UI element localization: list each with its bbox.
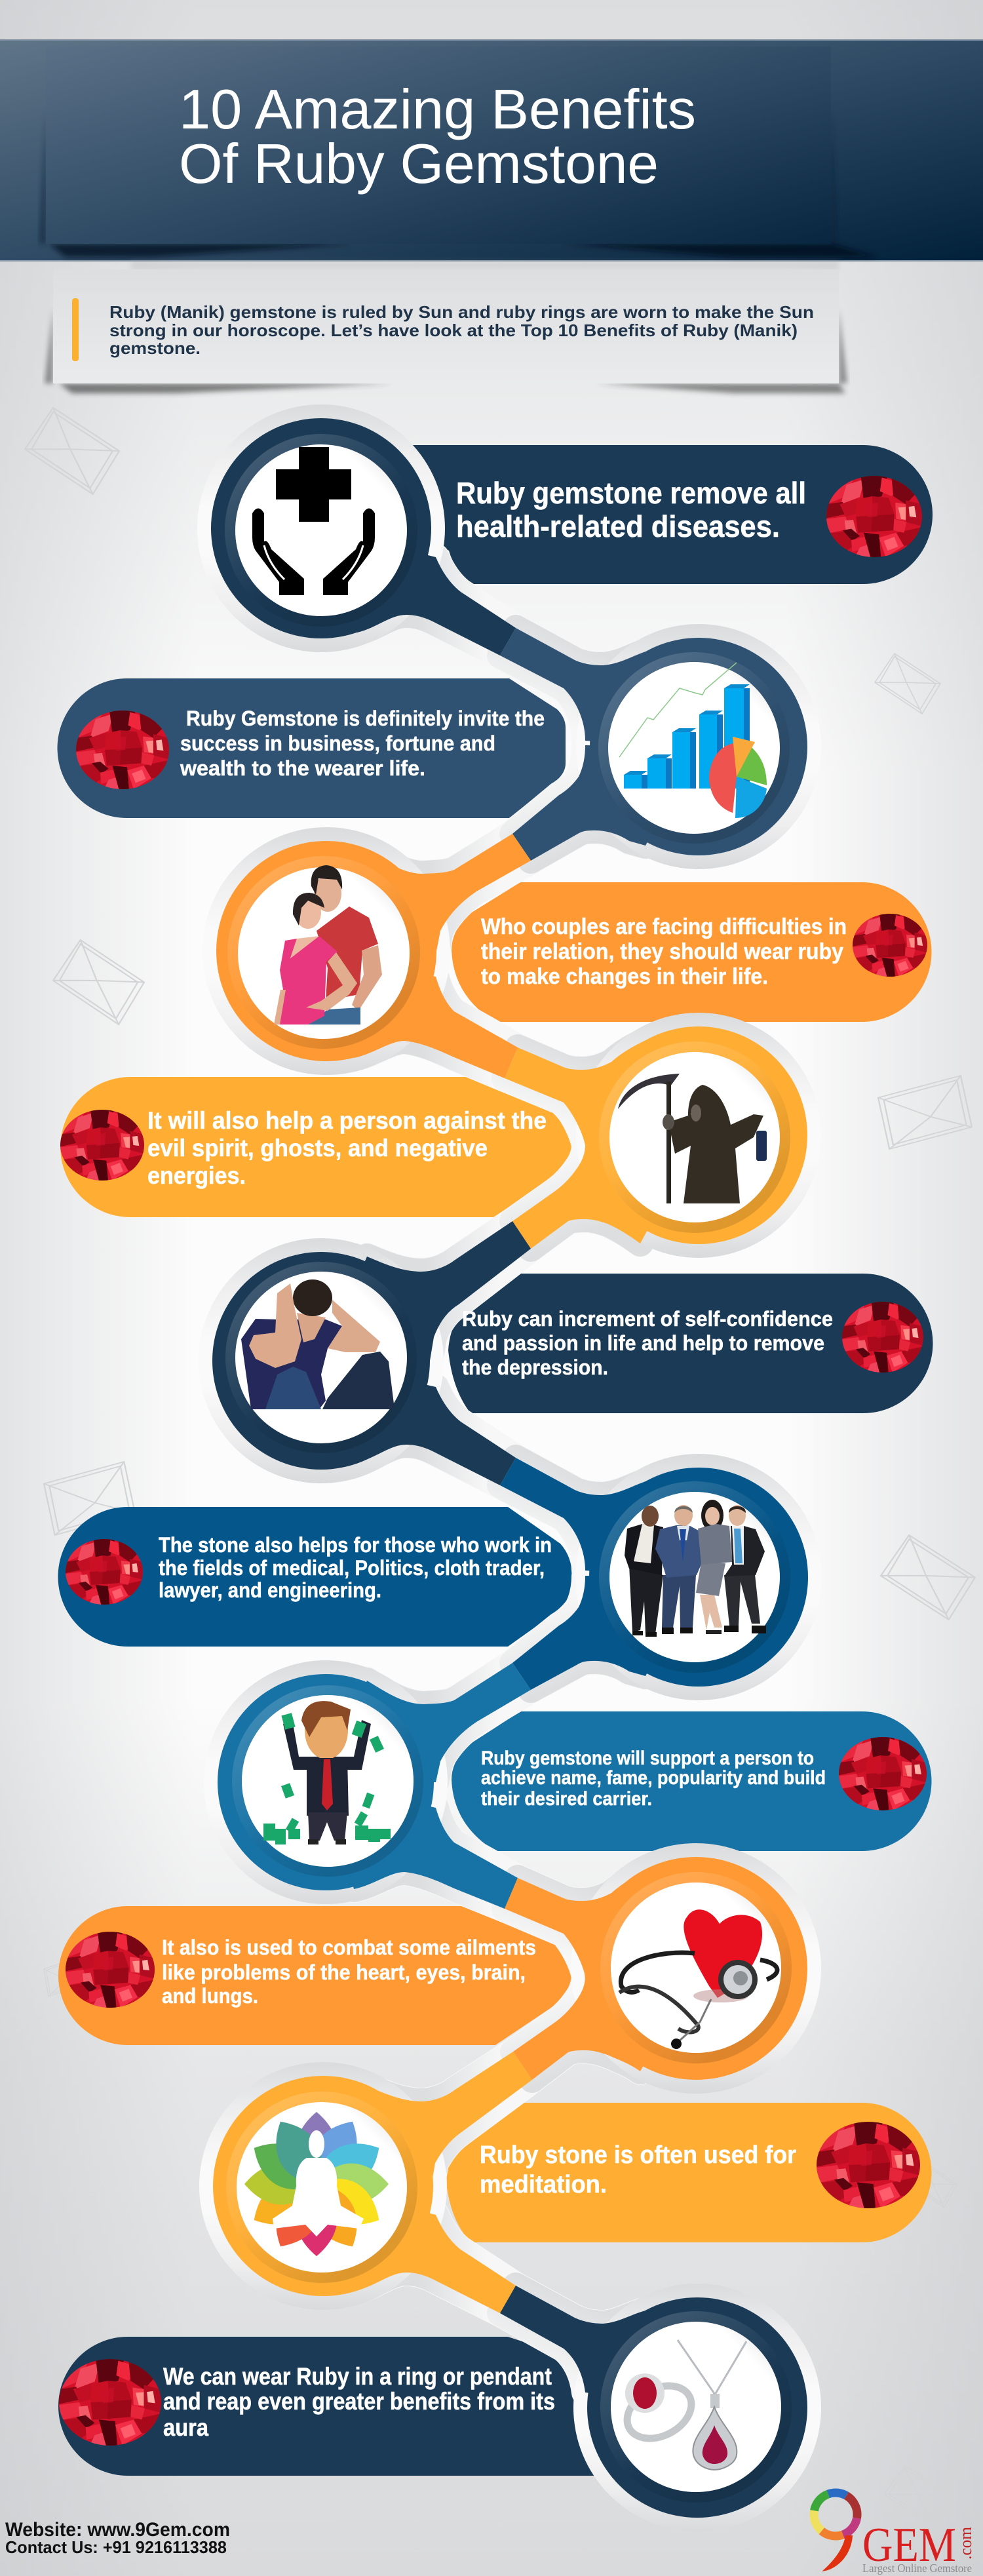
benefit 4 text: evil spirit, ghosts, and negative <box>147 1135 488 1161</box>
benefit 7 text <box>481 1747 826 1810</box>
benefit 5 text: and passion in life and help to remove <box>462 1331 824 1355</box>
inner white discs <box>225 434 792 2503</box>
benefit 3 text: to make changes in their life. <box>481 964 768 989</box>
benefit 2 text: success in business, fortune and <box>180 732 495 755</box>
icon: ruby ring and pendant <box>618 2340 746 2470</box>
benefit 4 text: energies. <box>147 1162 246 1189</box>
icon: couple <box>274 865 382 1025</box>
icon: depressed man <box>241 1279 395 1409</box>
benefit 10 text: and reap even greater benefits from its <box>163 2388 555 2415</box>
benefit 9 text: Ruby stone is often used for <box>480 2141 796 2169</box>
benefit 6 text <box>159 1533 552 1602</box>
pills: benefit banners <box>58 445 933 2476</box>
icon: bar chart and pie <box>619 663 767 818</box>
logo: 9GEM: GEM <box>862 2518 956 2572</box>
benefit 3 text: their relation, they should wear ruby <box>481 939 843 964</box>
logo: 9GEM: .com <box>956 2527 975 2560</box>
footer contact <box>5 2519 230 2557</box>
intro panel <box>45 261 847 393</box>
benefit 4 text: It will also help a person against the <box>147 1107 547 1134</box>
benefit 2 ring and connectors <box>500 628 807 861</box>
benefit 1 ring and connector <box>211 418 516 655</box>
benefit 9 text <box>480 2141 796 2198</box>
footer contact: Website: www.9Gem.com <box>5 2519 230 2541</box>
halos around circles and connectors <box>197 404 822 2531</box>
benefit 8 text: and lungs. <box>162 1984 258 2008</box>
logo: 9GEM: Largest Online Gemstore <box>862 2562 972 2575</box>
benefit 4 text <box>147 1107 547 1189</box>
title: Of Ruby Gemstone <box>179 133 659 195</box>
logo: 9GEM <box>805 2484 975 2575</box>
benefit 1 text <box>456 476 806 543</box>
benefit 6 text: lawyer, and engineering. <box>159 1578 381 1602</box>
benefit 3 ring and connectors <box>216 834 531 1078</box>
gems in benefit banners <box>59 476 927 2446</box>
benefit 1 text: health-related diseases. <box>456 509 780 543</box>
benefit 10 text: aura <box>163 2414 208 2441</box>
benefit 5 text <box>462 1307 833 1379</box>
intro panel: Ruby (Manik) gemstone is ruled by Sun and ruby rings are worn to make the Sun <box>109 302 814 322</box>
benefit 7 text: Ruby gemstone will support a person to <box>481 1747 814 1769</box>
benefit 5 ring and connectors <box>212 1221 531 1485</box>
background gem outlines <box>25 408 975 2526</box>
benefit 7 ring and connectors <box>218 1663 531 1909</box>
icon: businessman with money <box>263 1701 391 1844</box>
benefit 9 text: meditation. <box>480 2171 607 2198</box>
benefit 4 ring and connectors <box>505 1026 807 1249</box>
benefit 8 text <box>162 1936 536 2008</box>
title <box>179 79 696 195</box>
icon: cross and caring hands <box>252 447 375 595</box>
benefit 3 text <box>481 914 847 989</box>
benefit 2 text <box>180 707 545 780</box>
benefit 7 text: achieve name, fame, popularity and build <box>481 1767 826 1789</box>
benefit 8 text: like problems of the heart, eyes, brain, <box>162 1961 526 1984</box>
icon: business people <box>625 1500 766 1637</box>
benefit 7 text: their desired carrier. <box>481 1788 652 1810</box>
benefit 6 text: the fields of medical, Politics, cloth trader, <box>159 1556 545 1580</box>
benefit 6 ring and connectors <box>500 1458 808 1690</box>
benefit 8 text: It also is used to combat some ailments <box>162 1936 536 1959</box>
benefit 2 text: wealth to the wearer life. <box>180 756 425 780</box>
benefit 6 text: The stone also helps for those who work in <box>159 1533 552 1557</box>
benefit 5 text: Ruby can increment of self-confidence <box>462 1307 833 1331</box>
benefit 2 text: Ruby Gemstone is definitely invite the <box>186 707 545 730</box>
benefit 8 ring and connectors <box>505 1857 807 2080</box>
intro panel: strong in our horoscope. Let’s have look at the Top 10 Benefits of Ruby (Manik) <box>109 321 798 340</box>
benefit 5 text: the depression. <box>462 1356 608 1379</box>
benefit 10 text: We can wear Ruby in a ring or pendant <box>163 2363 552 2390</box>
benefit 1 text: Ruby gemstone remove all <box>456 476 806 510</box>
benefit 10 text <box>163 2363 555 2441</box>
intro panel: gemstone. <box>109 338 201 358</box>
benefit 3 text: Who couples are facing difficulties in <box>481 914 847 939</box>
footer contact: Contact Us: +91 9216113388 <box>5 2537 227 2557</box>
benefit 10 ring and connector <box>500 2286 807 2518</box>
icon: heart and stethoscope <box>619 1909 777 2049</box>
icon: meditation lotus <box>244 2111 389 2257</box>
title: 10 Amazing Benefits <box>179 79 696 141</box>
benefit 9 ring and connectors <box>213 2052 532 2313</box>
icon: grim reaper <box>618 1074 767 1203</box>
header band <box>0 39 983 262</box>
